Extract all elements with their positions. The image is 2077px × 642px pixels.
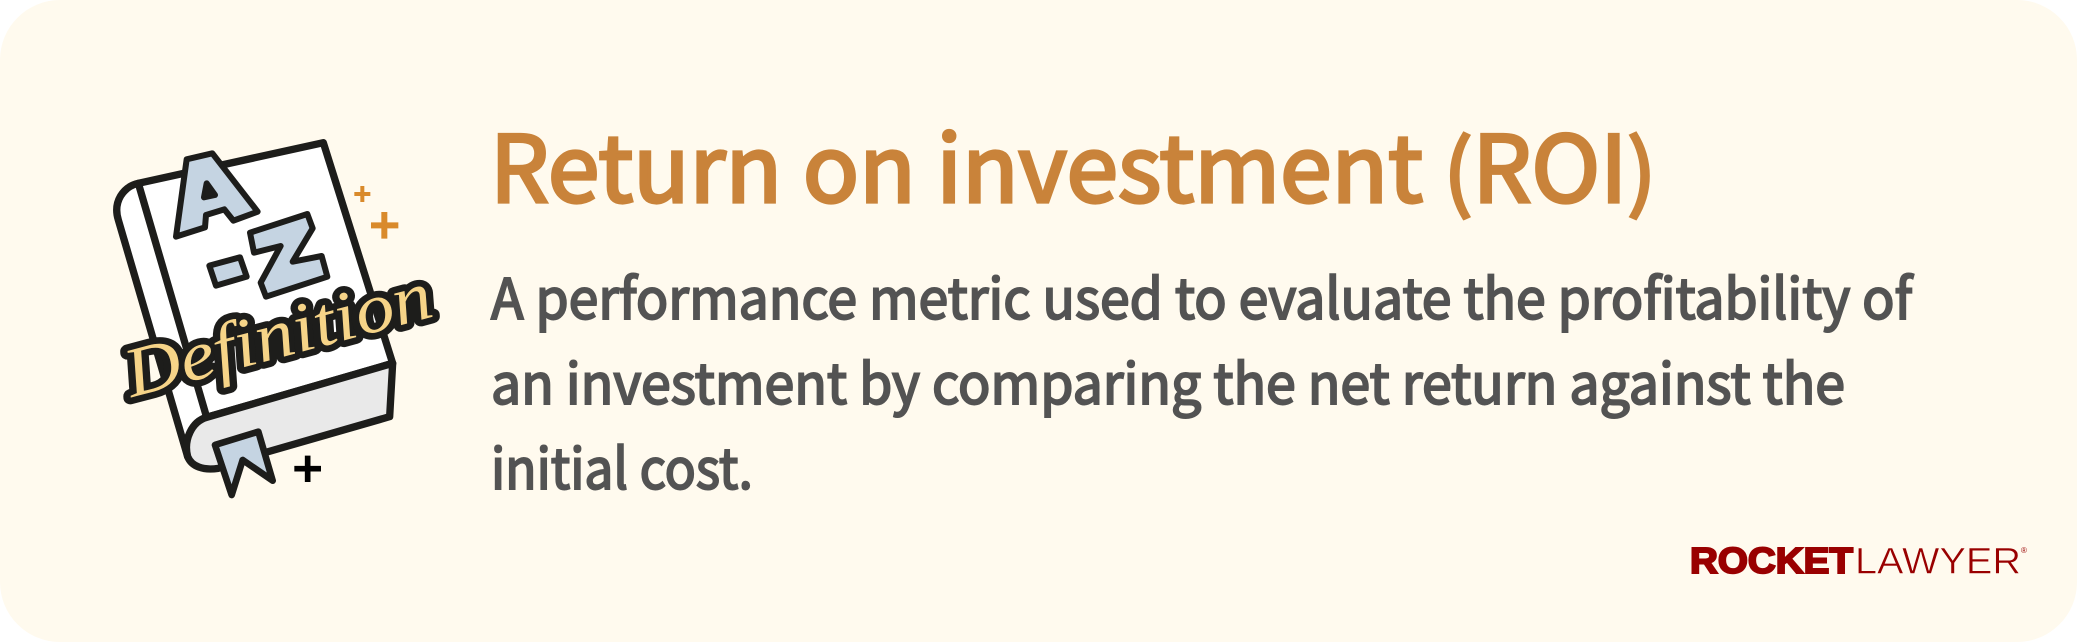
letter A	[176, 153, 258, 237]
letter dash	[209, 257, 247, 286]
logo word LAWYER: LAWYER	[1855, 540, 2021, 582]
bookmark	[215, 432, 273, 495]
hole of A	[204, 183, 214, 197]
icon: definition book	[115, 143, 440, 495]
orange sparkle large	[371, 212, 398, 239]
line 1: A performance metric used to evaluate the profitability of	[491, 255, 1914, 336]
label outline: Definition	[115, 257, 440, 413]
book pages	[187, 363, 393, 469]
book cover	[117, 143, 393, 457]
logo word ROCKET: ROCKET	[1690, 540, 1853, 581]
title: Return on investment (ROI)	[490, 96, 1656, 229]
definition text	[491, 255, 1914, 506]
registered mark: ®	[2021, 546, 2027, 555]
logo: Rocket Lawyer	[1690, 540, 2027, 582]
orange sparkle small	[354, 186, 370, 202]
line 3: initial cost.	[491, 425, 753, 506]
book spine line	[138, 183, 207, 417]
black sparkle	[294, 456, 321, 482]
definition script label	[115, 257, 440, 413]
line 2: an investment by comparing the net return against the	[491, 340, 1845, 421]
letter Z	[250, 214, 327, 297]
label fill: Definition	[115, 257, 440, 413]
